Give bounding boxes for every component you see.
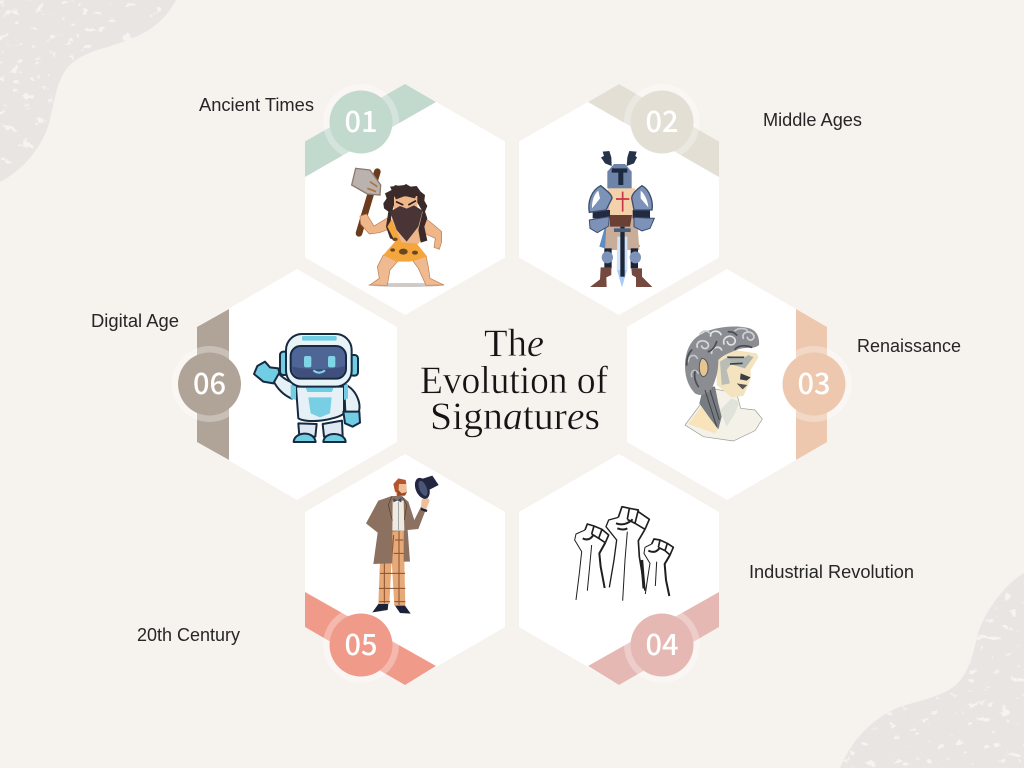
title: Signatures xyxy=(430,395,600,438)
icon: waving robot xyxy=(254,334,360,442)
panel: 03 Renaissance xyxy=(627,269,961,500)
ribbon 01 xyxy=(305,84,436,177)
badge 04: 04 xyxy=(645,622,679,664)
panel: 02 Middle Ages xyxy=(519,84,862,315)
badge 05 xyxy=(323,607,399,683)
ribbon 05 xyxy=(305,592,436,685)
badge 05: 05 xyxy=(344,622,378,664)
icon: caveman with stone axe xyxy=(352,168,444,287)
panel: 04 Industrial Revolution xyxy=(519,454,914,685)
label: Middle Ages: Middle Ages xyxy=(763,110,862,130)
ribbon 06 xyxy=(197,309,229,460)
background blob: top left xyxy=(0,0,180,190)
title xyxy=(420,322,608,438)
panel: 01 Ancient Times xyxy=(199,84,505,315)
icon: three raised fists xyxy=(575,507,673,601)
label: Renaissance: Renaissance xyxy=(857,336,961,356)
badge 06 xyxy=(172,346,248,422)
label: Ancient Times: Ancient Times xyxy=(199,95,314,115)
badge 01 xyxy=(323,84,399,160)
badge 03: 03 xyxy=(797,361,831,403)
label: Industrial Revolution: Industrial Revolution xyxy=(749,562,914,582)
badge 06: 06 xyxy=(193,361,226,403)
label: Digital Age: Digital Age xyxy=(91,311,179,331)
label: 20th Century: 20th Century xyxy=(137,625,240,645)
badge 02: 02 xyxy=(645,99,679,141)
badge 02 xyxy=(624,84,700,160)
icon: bust of David xyxy=(685,326,762,441)
ribbon 04 xyxy=(588,592,719,685)
icon: gentleman raising top hat xyxy=(366,476,439,614)
background blob: bottom right xyxy=(840,570,1024,768)
panel: 05 20th Century xyxy=(137,454,505,685)
ribbon 03 xyxy=(796,309,827,460)
ribbon 02 xyxy=(588,84,719,177)
title: Evolution of xyxy=(420,359,608,402)
badge 03 xyxy=(776,346,852,422)
panel: 06 Digital Age xyxy=(91,269,397,500)
title: The xyxy=(484,322,544,365)
icon: armoured knight xyxy=(589,151,654,287)
badge 04 xyxy=(624,607,700,683)
badge 01: 01 xyxy=(344,99,378,141)
